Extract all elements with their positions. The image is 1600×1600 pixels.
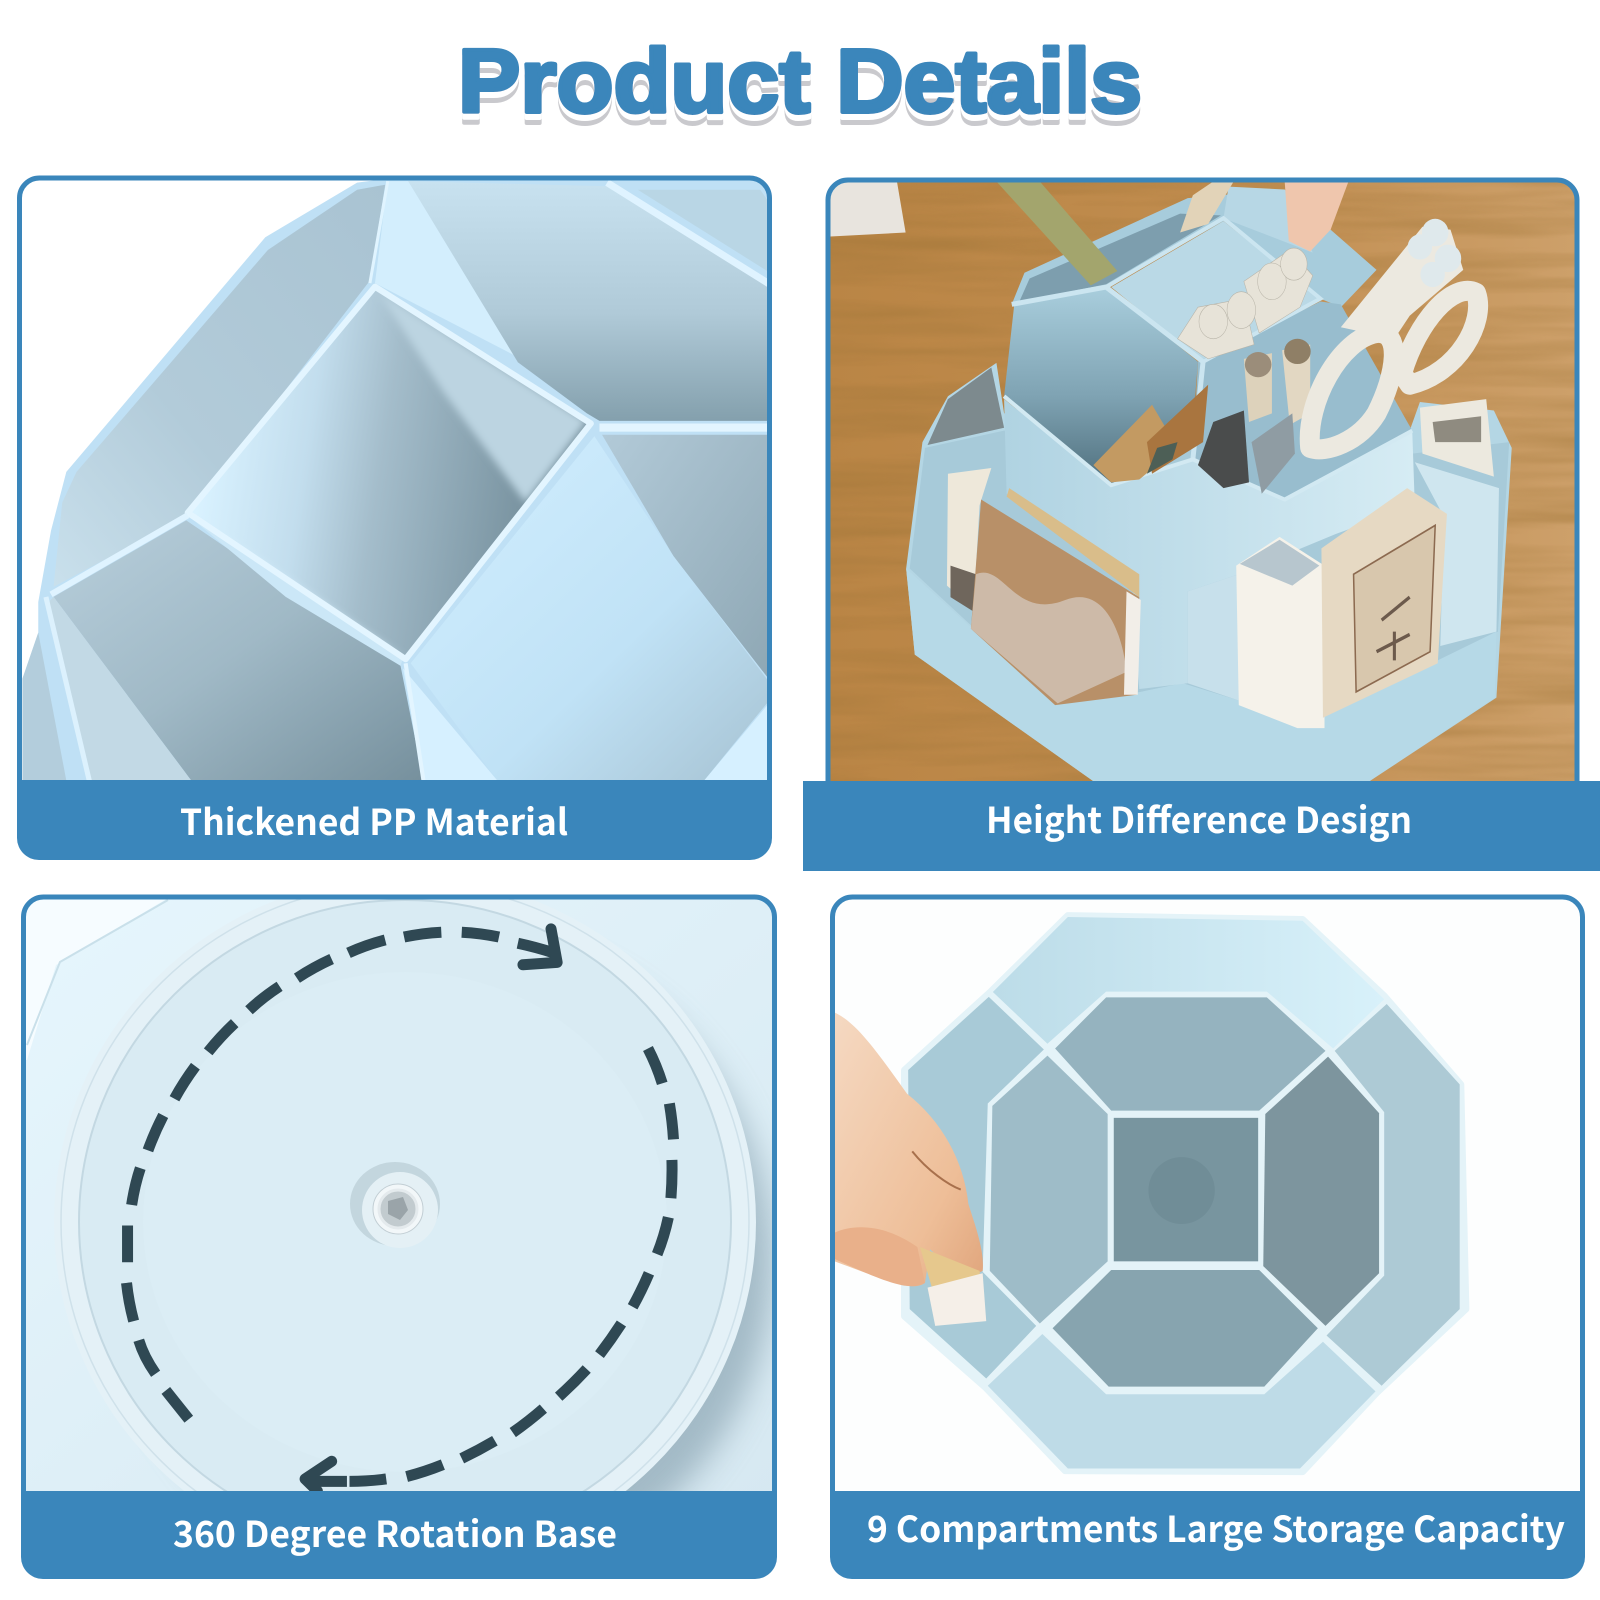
white cube xyxy=(1236,537,1324,728)
panel: height difference design xyxy=(803,180,1600,871)
caption: 360 Degree Rotation Base xyxy=(173,1506,617,1558)
title: Product Details xyxy=(458,32,1142,132)
caption bar xyxy=(830,1491,1585,1579)
stapler xyxy=(1420,399,1494,477)
caption bar xyxy=(21,1491,777,1579)
back compartments xyxy=(1012,189,1377,307)
caption: Height Difference Design xyxy=(986,792,1412,844)
clips and pens xyxy=(1198,411,1249,488)
scissors xyxy=(1341,227,1463,339)
stamp box xyxy=(1321,488,1447,718)
panel frame xyxy=(828,180,1577,790)
panel frame xyxy=(24,897,774,1491)
panel frame xyxy=(20,178,770,780)
pencils xyxy=(1094,404,1164,482)
caption bar xyxy=(17,780,772,860)
finger and pen xyxy=(1285,181,1348,251)
green pencil xyxy=(996,181,1117,285)
caption bar xyxy=(803,781,1600,871)
central screw xyxy=(350,1162,440,1248)
center compartments xyxy=(1055,997,1326,1111)
panel photo: compartments close-up xyxy=(20,179,770,799)
eraser xyxy=(946,468,992,588)
caption: 9 Compartments Large Storage Capacity xyxy=(867,1501,1565,1553)
hand holding eraser xyxy=(835,1013,986,1326)
rotation arrows: dashed circle xyxy=(127,929,673,1491)
panel photo: organizer on wooden desk xyxy=(828,180,1577,800)
panel photo: top view of organizer xyxy=(835,912,1470,1476)
panel photo: rotating base xyxy=(26,900,772,1491)
panel: thickened PP material xyxy=(17,178,772,860)
paper pad xyxy=(828,181,906,237)
panel: 360 degree rotation base xyxy=(21,876,777,1587)
markers xyxy=(1178,248,1313,359)
caption: Thickened PP Material xyxy=(180,794,568,846)
notebook xyxy=(1007,488,1139,597)
center cell with soft shading xyxy=(184,286,592,663)
panel: 9 compartments large storage capacity xyxy=(830,897,1585,1579)
panel frame xyxy=(832,897,1582,1491)
